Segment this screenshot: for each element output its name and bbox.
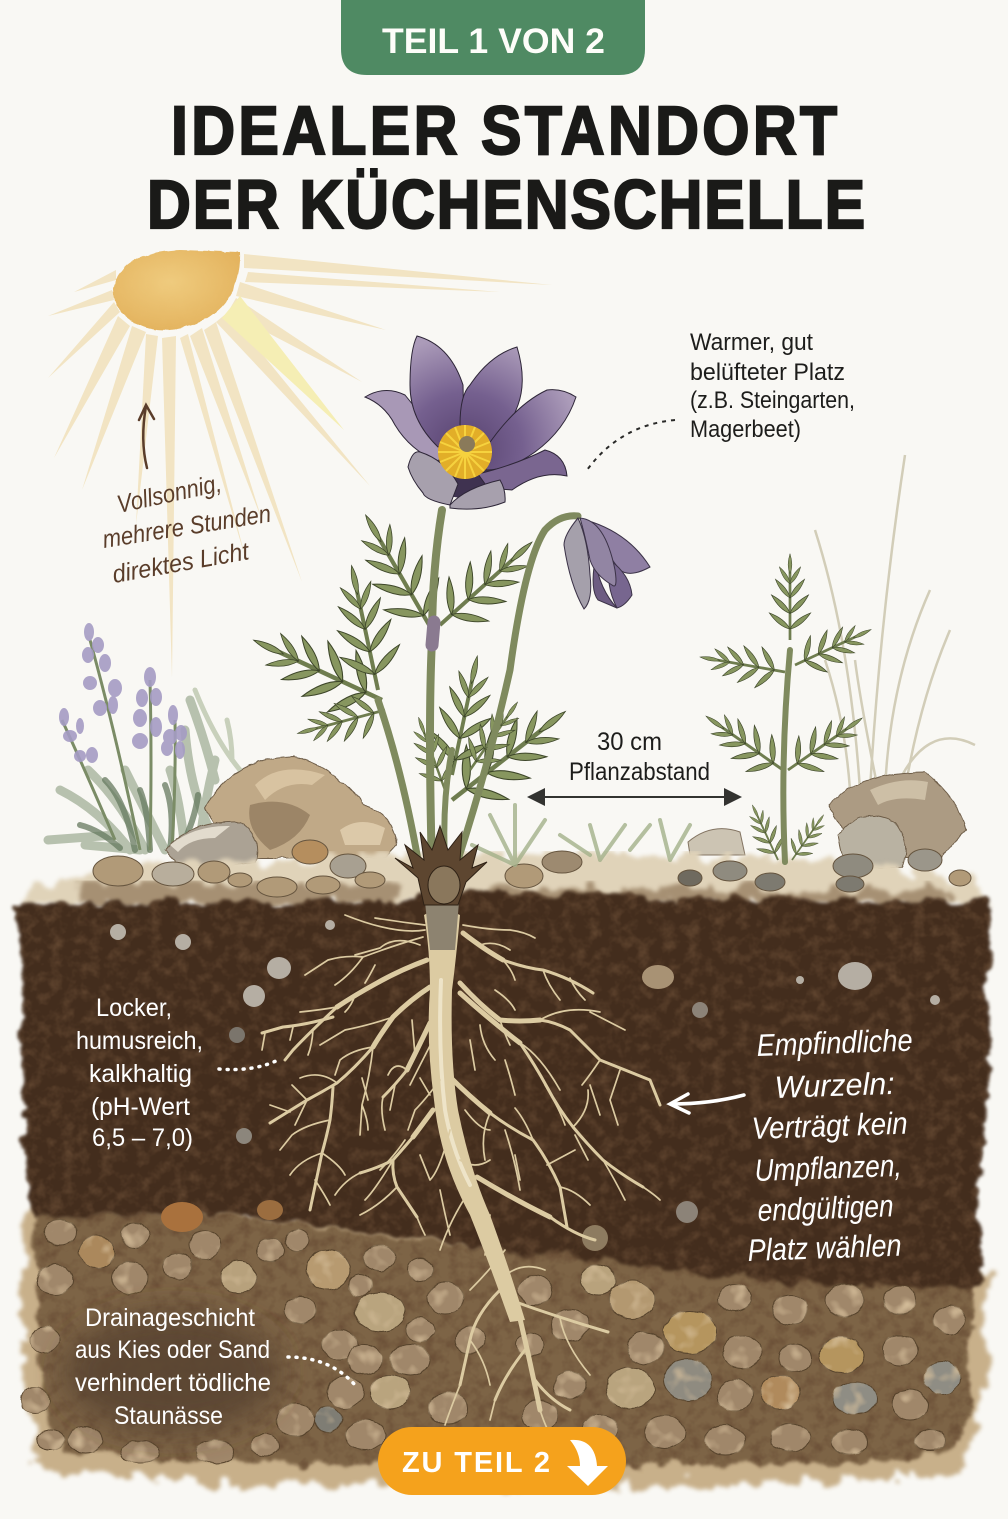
annotation: warm airy place: (z.B. Steingarten, [690,387,855,414]
double arrow [527,788,742,806]
petal: right [486,390,576,470]
petal: lower right [478,450,567,490]
stems [378,510,578,870]
open flower [365,336,576,509]
title [147,91,865,243]
annotation: sensitive roots: Umpflanzen, [754,1148,902,1188]
annotation: plant spacing: 30 cm [597,728,662,756]
annotation: plant spacing [527,728,742,806]
annotation: drainage: Drainageschicht [85,1304,255,1332]
grass, right background [815,455,975,790]
annotation: drainage: aus Kies oder Sand [75,1336,270,1364]
thick branches [337,933,550,1217]
soil: dark humus layer [16,892,994,1287]
dotted leader [288,1357,355,1385]
annotation: full sun: direktes Licht [110,537,252,589]
annotation: soil type: humusreich, [76,1027,203,1055]
icon: curved arrow down [567,1440,608,1486]
medium branches [262,960,660,1410]
neighbour plant, right [692,554,880,868]
petal: left [365,390,447,462]
petal: top left [410,336,464,447]
annotation: full sun [101,405,273,589]
annotation: sensitive roots: Wurzeln: [774,1066,895,1105]
dotted leader [219,1059,280,1070]
soil: gravel pebbles [21,1219,966,1464]
annotation: plant spacing: Pflanzabstand [569,758,710,786]
soil: dark patch behind drainage text [64,1312,280,1432]
header tab [341,0,645,75]
icon: sun with rays [48,250,552,678]
lavender plant [48,623,240,850]
flower shadow base [423,438,507,498]
title: DER KÜCHENSCHELLE [147,165,865,243]
soil cross-section [16,892,994,1486]
main plant [238,336,650,905]
annotation: sensitive roots: Empfindliche [756,1023,913,1063]
annotation: soil type: Locker, [96,994,172,1022]
crown [395,826,487,905]
annotation: sensitive roots [670,1023,913,1268]
button: to part 2 [378,1427,626,1495]
annotation: sensitive roots: endgültigen [757,1188,894,1228]
petal: top right [460,347,522,452]
arrow: to roots [670,1094,744,1113]
annotation: drainage: verhindert tödliche [75,1369,271,1397]
annotation: soil type: 6,5 – 7,0) [92,1124,193,1152]
header tab: TEIL 1 VON 2 [382,22,605,61]
annotation: sensitive roots: Verträgt kein [751,1106,908,1146]
soil: gravel drainage layer [35,1213,972,1465]
annotation: soil type [76,994,280,1152]
taproot [424,910,525,1322]
annotation: warm airy place [587,329,855,470]
ground surface strip [20,805,990,905]
annotation: warm airy place: Warmer, gut [690,329,813,356]
petal: lower left [408,452,458,505]
roots [262,902,660,1430]
annotation: warm airy place: Magerbeet) [690,416,801,443]
dashed leader [587,420,675,470]
annotation: sensitive roots: Platz wählen [747,1228,902,1268]
annotation: drainage [75,1304,355,1430]
nodding bud [564,518,650,609]
title: IDEALER STANDORT [171,91,837,169]
button: to part 2: ZU TEIL 2 [402,1447,550,1479]
annotation: full sun: mehrere Stunden [101,500,273,554]
annotation: drainage: Staunässe [114,1402,223,1430]
rocks, left [165,757,397,866]
annotation: soil type: (pH-Wert [91,1093,190,1121]
soil: small stones in humus [110,920,940,1251]
rocks, right [688,772,966,868]
flower centre [438,425,492,479]
leaves [238,498,588,829]
petal: lower centre [450,480,505,509]
annotation: soil type: kalkhaltig [89,1060,192,1088]
fine rootlets [262,915,660,1430]
soil: pale outer edge [21,1195,986,1486]
annotation: warm airy place: belüfteter Platz [690,359,845,386]
arrow: up to sun [139,405,154,468]
annotation: full sun: Vollsonnig, [114,469,224,519]
